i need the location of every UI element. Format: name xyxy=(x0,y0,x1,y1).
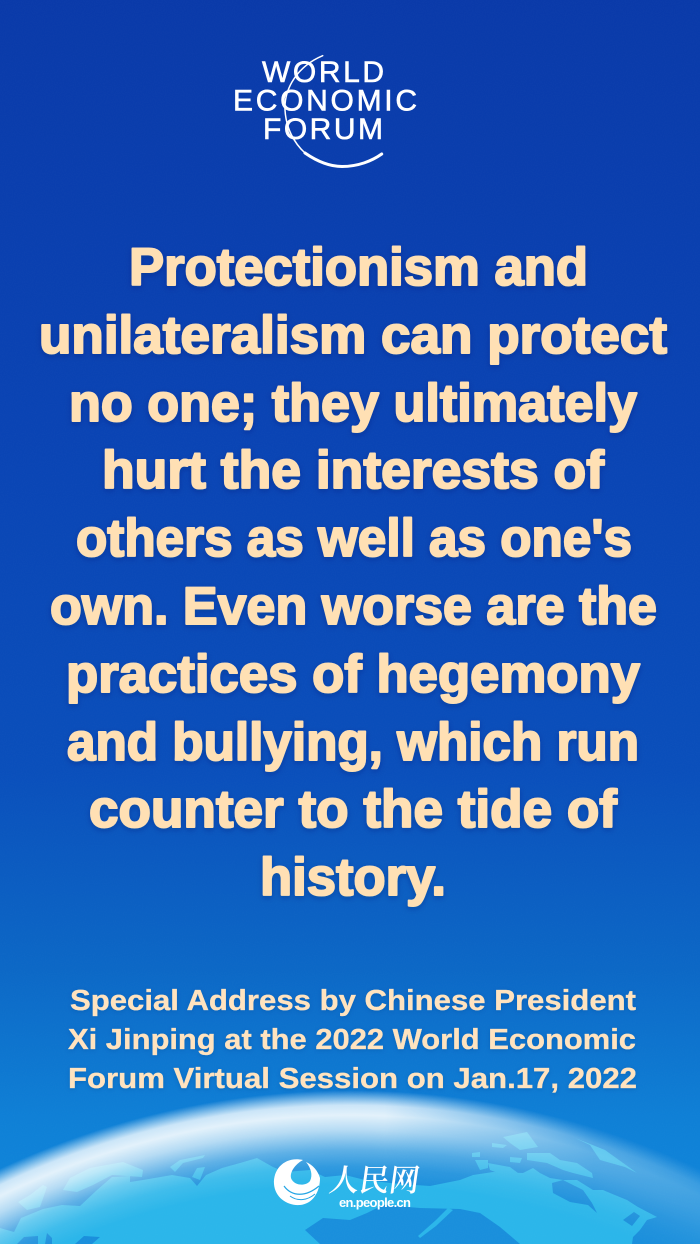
main quote xyxy=(39,238,667,907)
main quote: Protectionism and xyxy=(129,238,588,297)
People's Daily Online logo xyxy=(274,1155,423,1210)
source attribution: Special Address by Chinese President xyxy=(70,985,637,1017)
main quote: own. Even worse are the xyxy=(50,577,657,636)
source attribution: Xi Jinping at the 2022 World Economic xyxy=(68,1024,636,1056)
main quote: counter to the tide of xyxy=(89,780,617,839)
logo wordmark: WORLD xyxy=(262,56,384,89)
source attribution: Forum Virtual Session on Jan.17, 2022 xyxy=(68,1063,637,1095)
main quote: others as well as one's xyxy=(76,509,632,568)
logo url: en.people.cn xyxy=(339,1195,411,1210)
World Economic Forum logo xyxy=(233,56,417,167)
logo wordmark: ECONOMIC xyxy=(233,84,417,118)
atmosphere glow xyxy=(0,1080,700,1244)
main quote: history. xyxy=(260,848,446,907)
ocean xyxy=(0,1080,700,1244)
logo Chinese name: 人民网 xyxy=(327,1155,423,1200)
source attribution xyxy=(68,985,637,1095)
main quote: unilateralism can protect xyxy=(39,306,667,365)
main quote: practices of hegemony xyxy=(66,645,641,704)
hudson bay and inland waters xyxy=(17,1180,640,1244)
logo wordmark xyxy=(233,56,417,146)
logo emblem xyxy=(274,1159,320,1205)
logo wordmark: FORUM xyxy=(263,113,383,146)
main quote: no one; they ultimately xyxy=(69,374,638,433)
continents xyxy=(0,1132,657,1244)
main quote: and bullying, which run xyxy=(67,713,639,772)
logo arc xyxy=(285,56,323,153)
logo swoosh xyxy=(305,153,382,166)
globe xyxy=(0,1080,700,1244)
main quote: hurt the interests of xyxy=(102,441,604,500)
